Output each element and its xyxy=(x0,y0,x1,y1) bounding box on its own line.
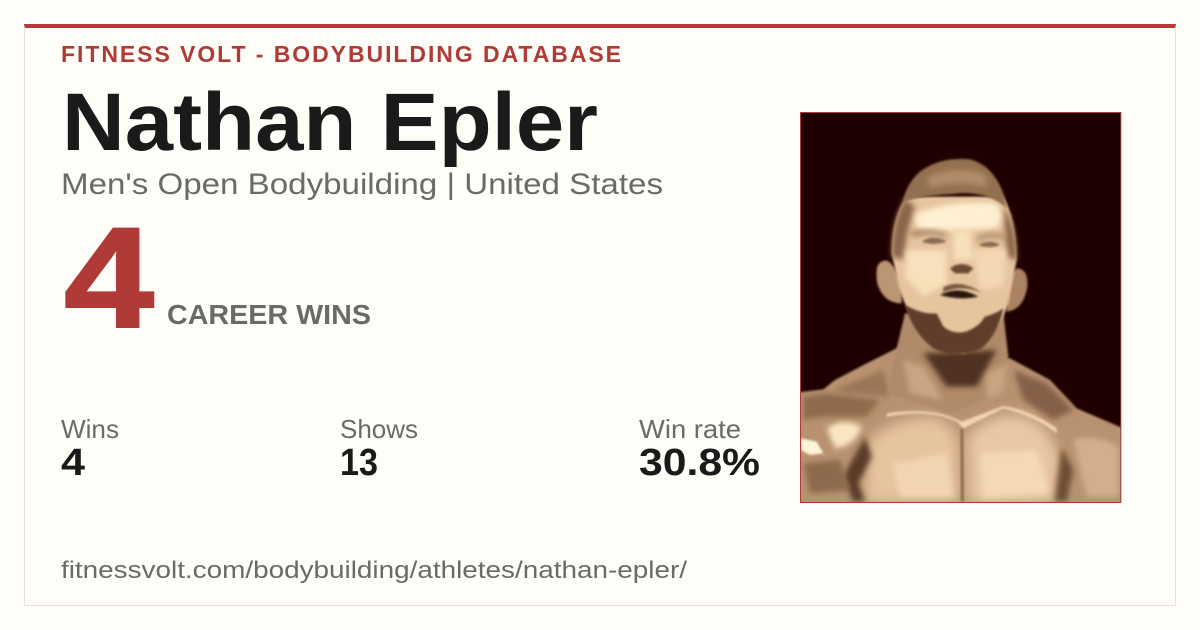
hair xyxy=(903,159,1007,208)
ears xyxy=(876,261,1027,312)
title: athlete name: Nathan Epler xyxy=(62,77,598,168)
stat: wins xyxy=(61,414,119,484)
photo background xyxy=(800,112,1121,502)
big career wins number: 4 xyxy=(64,199,154,358)
subtitle: Men's Open Bodybuilding | United States xyxy=(61,168,663,201)
stat: win rate: Win rate xyxy=(639,414,741,444)
stat: win rate: 30.8% xyxy=(639,442,760,484)
hair highlight xyxy=(927,170,987,187)
footer url: fitnessvolt.com/bodybuilding/athletes/nathan-epler/ xyxy=(61,557,687,584)
neck xyxy=(887,313,1008,413)
athlete photo illustration xyxy=(800,112,1122,503)
stat: wins: 4 xyxy=(61,442,85,484)
eyes, nose and mouth xyxy=(910,230,1005,298)
head xyxy=(892,197,1017,353)
stat: shows: Shows xyxy=(340,414,418,444)
stat: win rate xyxy=(639,414,760,484)
stat: wins: Wins xyxy=(61,414,119,444)
torso xyxy=(797,347,1123,507)
stat: shows xyxy=(340,414,418,484)
eyebrow heading: FITNESS VOLT - BODYBUILDING DATABASE xyxy=(61,41,621,67)
beard xyxy=(905,305,1003,354)
stat: shows: 13 xyxy=(340,442,378,484)
career wins label: CAREER WINS xyxy=(167,299,371,330)
